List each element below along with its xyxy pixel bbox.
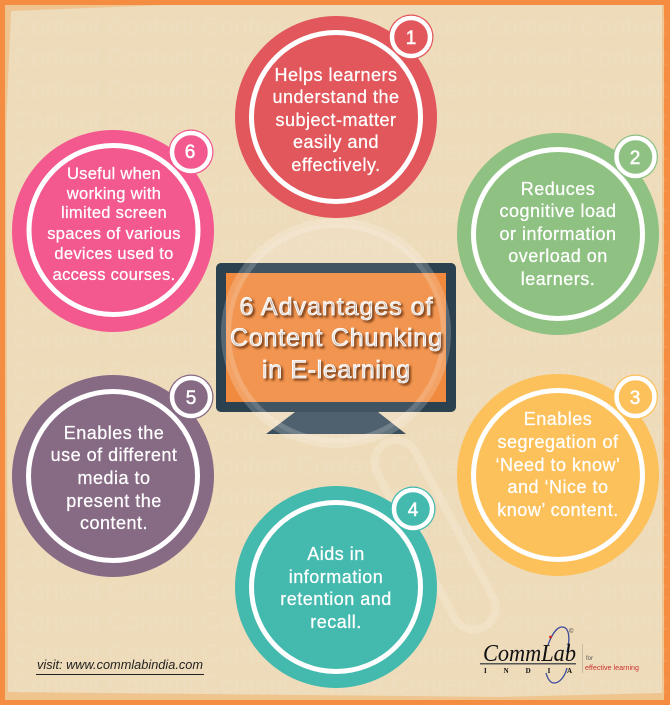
logo: CommLab India: © (569, 628, 574, 635)
panel: advantage 4: 4 (408, 500, 419, 521)
logo: CommLab India: I N D I A (484, 667, 572, 675)
panel: advantage 3 (457, 374, 659, 576)
logo: CommLab India: CommLab (483, 641, 576, 667)
panel: advantage 5: media to (77, 468, 151, 488)
panel: advantage 1 (235, 14, 437, 218)
panel: advantage 4: recall. (310, 612, 362, 632)
panel: advantage 1: easily and (293, 132, 379, 152)
panel: advantage 2: overload on (508, 246, 608, 266)
icon: monitor (216, 263, 456, 434)
logo: CommLab India: effective learning (585, 665, 639, 672)
panel: advantage 4 (235, 486, 437, 688)
title: Content Chunking (230, 324, 442, 352)
panel: advantage 2: cognitive load (499, 201, 617, 221)
panel: advantage 3: segregation of (497, 432, 619, 452)
panel: advantage 3: Enables (524, 409, 592, 429)
panel: advantage 3: and ‘Nice to (507, 477, 609, 497)
title: in E-learning (262, 356, 410, 384)
panel: advantage 3: know’ content. (497, 500, 619, 520)
panel: advantage 6: spaces of various (47, 225, 181, 243)
panel: advantage 6: working with (66, 185, 161, 203)
title: 6 Advantages of (240, 293, 433, 321)
panel: advantage 5: content. (80, 513, 148, 533)
panel: advantage 5: use of different (51, 445, 177, 465)
panel: advantage 4: Aids in (307, 544, 365, 564)
panel: advantage 6: limited screen (61, 204, 167, 222)
panel: advantage 6: access courses. (53, 266, 175, 284)
website link: visit: www.commlabindia.com (37, 657, 203, 672)
panel: advantage 6: devices used to (54, 245, 174, 263)
icon: magnifying glass (226, 223, 496, 630)
panel: advantage 2: Reduces (521, 179, 595, 199)
panel: advantage 6 (12, 130, 214, 332)
panel: advantage 1: effectively. (291, 155, 381, 175)
panel: advantage 5: 5 (186, 388, 196, 409)
panel: advantage 1: 1 (406, 28, 416, 49)
panel: advantage 3: 3 (630, 388, 640, 409)
panel: advantage 5: present the (66, 491, 162, 511)
logo: CommLab India: for (586, 656, 593, 662)
panel: advantage 4: information (289, 567, 383, 587)
panel: advantage 2: learners. (521, 269, 595, 289)
panel: advantage 1: Helps learners (274, 65, 398, 85)
logo: CommLab India (480, 627, 639, 683)
panel: advantage 4: retention and (280, 589, 392, 609)
panel: advantage 2 (457, 133, 659, 335)
panel: advantage 2: 2 (630, 148, 640, 169)
panel: advantage 2: or information (499, 224, 617, 244)
panel: advantage 6: Useful when (67, 165, 161, 183)
panel: advantage 1: subject-matter (275, 110, 397, 130)
panel: advantage 5: Enables the (64, 423, 164, 443)
title (230, 293, 442, 384)
panel: advantage 6: 6 (185, 142, 195, 163)
panel: advantage 3: ‘Need to know’ (495, 455, 621, 475)
panel: advantage 5 (12, 374, 214, 577)
panel: advantage 1: understand the (272, 87, 400, 107)
